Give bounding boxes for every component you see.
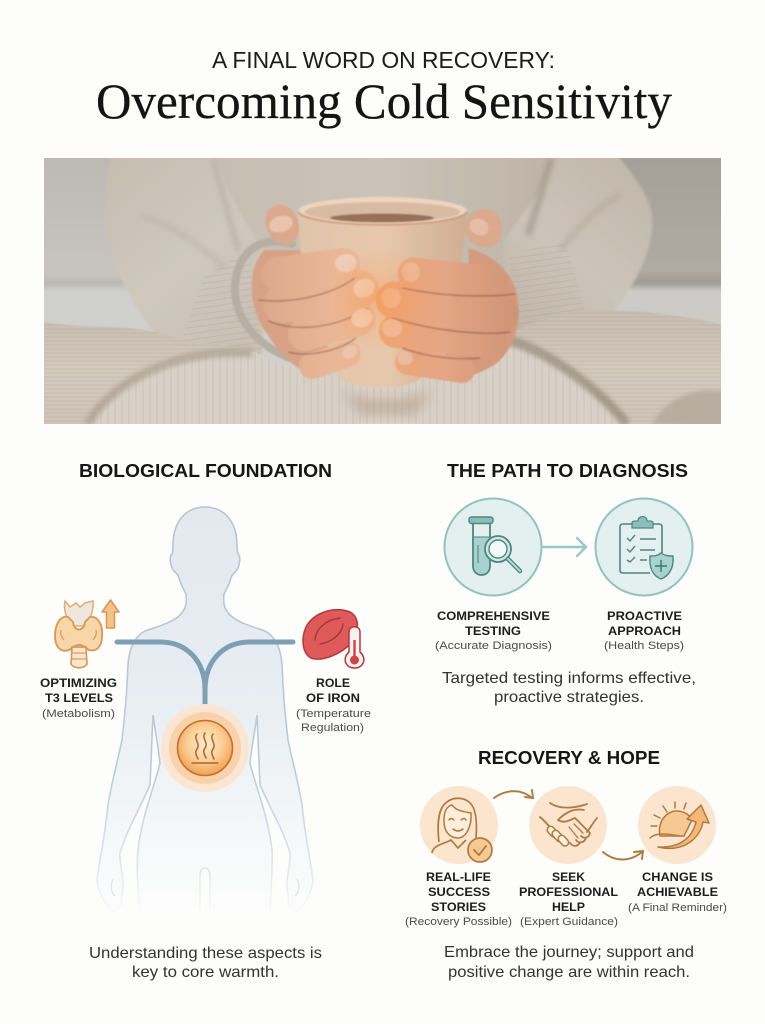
icon: thyroid with up arrow [55,600,119,668]
arrow: testing to approach [543,538,586,556]
icon: clipboard and shield [596,498,692,596]
photo: blanket [40,310,725,430]
photo: left hand [252,250,330,376]
label: role of iron: (Temperature [296,708,371,720]
panel: path to diagnosis [435,461,696,706]
label: change is achievable: (A Final Reminder) [628,902,727,914]
label: role of iron: ROLE [316,676,350,690]
title: main heading: Overcoming Cold Sensitivity [96,73,672,129]
label: real-life success stories [405,870,512,928]
icon: handshake [529,786,607,864]
label: change is achievable: ACHIEVABLE [637,885,718,899]
photo: hands around a warm mug [40,150,725,430]
label: seek professional help: HELP [552,900,585,914]
photo: mug handle [235,241,292,358]
caption: recovery [444,944,694,981]
label: seek professional help: SEEK [552,870,585,884]
panel: recovery and hope [405,748,727,981]
label: real-life success stories: SUCCESS [428,885,490,899]
arrow: help to change [603,851,643,860]
heading: recovery and hope: RECOVERY & HOPE [478,748,660,768]
caption: recovery: Embrace the journey; support and [444,944,694,961]
heading: biological foundation: BIOLOGICAL FOUNDATION [79,461,332,481]
caption: biological foundation: key to core warmth. [132,964,279,981]
label: proactive approach [604,609,684,652]
arrow: stories to help [494,790,533,798]
label: seek professional help: PROFESSIONAL [519,885,618,899]
label: comprehensive testing [435,609,552,652]
icon: rising sun and arrow [638,786,716,864]
photo: right hand [440,248,519,380]
caption: biological foundation: Understanding these aspects is [89,945,322,962]
title [96,47,672,129]
label: real-life success stories: REAL-LIFE [426,870,491,884]
icon: test tube and magnifier [444,498,542,596]
label: role of iron [296,676,371,734]
label: seek professional help [519,870,618,928]
panel: biological foundation [40,461,371,981]
label: comprehensive testing: COMPREHENSIVE [437,609,550,623]
icon: smiling person with check [420,786,498,864]
label: proactive approach: (Health Steps) [604,640,684,652]
caption: recovery: positive change are within reach. [448,964,690,981]
photo: mug body [298,212,467,388]
label: proactive approach: APPROACH [608,624,681,638]
label: optimizing T3 levels: OPTIMIZING [40,676,117,690]
label: proactive approach: PROACTIVE [607,609,682,623]
label: change is achievable [628,870,727,914]
connector: Y-shaped pathway [117,642,293,722]
title: kicker line: A FINAL WORD ON RECOVERY: [212,47,555,73]
icon: red blood cell with thermometer [303,610,364,668]
caption: diagnosis [442,670,696,706]
caption: diagnosis: proactive strategies. [494,689,644,706]
photo: mug and hands [235,197,519,388]
label: change is achievable: CHANGE IS [642,870,713,884]
photo: warm glow [341,258,410,342]
heading: path to diagnosis: THE PATH TO DIAGNOSIS [447,461,688,481]
label: role of iron: OF IRON [306,691,360,705]
caption: biological foundation [89,945,322,981]
label: seek professional help: (Expert Guidance) [520,916,618,928]
label: role of iron: Regulation) [301,722,364,734]
body silhouette [97,507,313,915]
label: comprehensive testing: TESTING [465,624,521,638]
label: real-life success stories: (Recovery Possible) [405,916,512,928]
caption: diagnosis: Targeted testing informs effective, [442,670,696,687]
icon: core warmth [161,704,249,792]
label: comprehensive testing: (Accurate Diagnosis) [435,640,552,652]
label: real-life success stories: STORIES [431,900,486,914]
label: optimizing T3 levels: T3 LEVELS [45,691,113,705]
label: optimizing T3 levels: (Metabolism) [42,708,115,720]
label: optimizing T3 levels [40,676,117,720]
